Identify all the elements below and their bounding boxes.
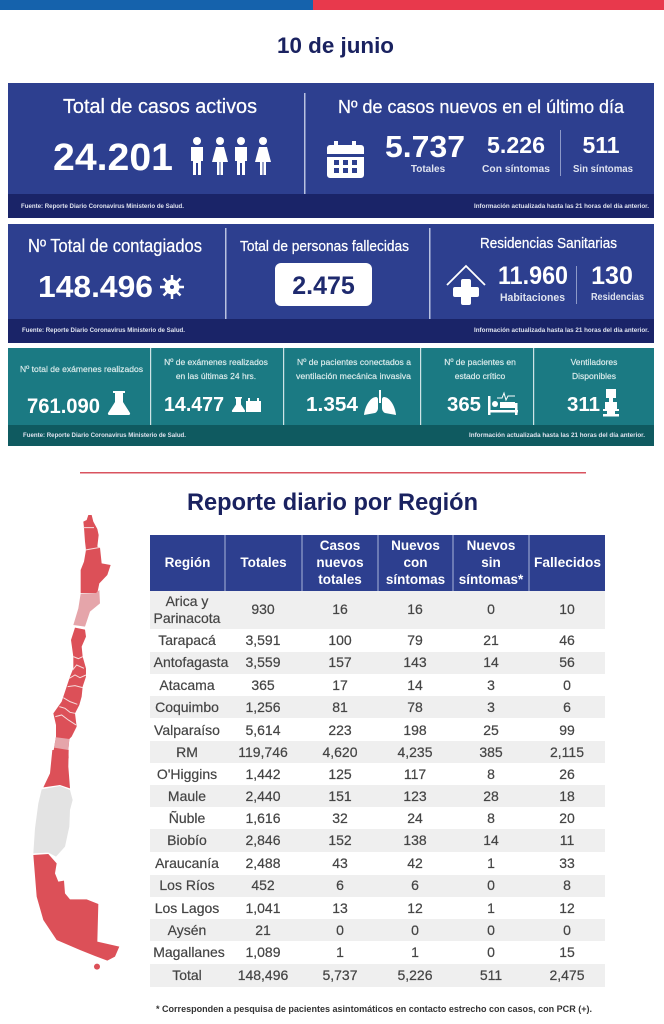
row: Maule: 2,440 (245, 788, 281, 804)
row: Total: Total (172, 967, 202, 983)
row: Los Ríos: 6 (336, 877, 344, 893)
table header: Nuevos (467, 538, 515, 553)
row: Arica y Parinacota: 16 (407, 601, 423, 617)
label: total exams: Nº total de exámenes realizados (20, 364, 143, 374)
row: Arica y Parinacota: 10 (559, 601, 575, 617)
map of Chile (33, 515, 119, 970)
row: Atacama: 0 (563, 677, 571, 693)
row: Valparaíso: 99 (559, 722, 575, 738)
icon: house with cross (447, 266, 485, 305)
row: Magallanes: 15 (559, 944, 575, 960)
row: Valparaíso: Valparaíso (154, 722, 220, 738)
row: RM: 2,115 (550, 744, 584, 760)
update note: Información actualizada hasta las 21 horas del día anterior. (474, 328, 649, 334)
row: Biobío: 152 (328, 832, 352, 848)
table header: Totales (240, 555, 287, 570)
row: Ñuble: 8 (487, 810, 495, 826)
row: Biobío: 138 (403, 832, 427, 848)
row: Total: 2,475 (549, 967, 585, 983)
label: rooms: Habitaciones (500, 292, 565, 304)
row: Magallanes: 1,089 (245, 944, 281, 960)
row: Aysén: 0 (411, 922, 419, 938)
row: Biobío: 11 (560, 832, 574, 848)
row: Biobío: Biobío (167, 832, 207, 848)
label: without symptoms: Sin síntomas (573, 164, 633, 175)
icon: hospital bed (488, 393, 518, 415)
row: Los Ríos: 452 (251, 877, 275, 893)
table header: Fallecidos (534, 555, 601, 570)
row: Aysén: 0 (487, 922, 495, 938)
row: Los Lagos: 1 (487, 900, 495, 916)
row: Magallanes: Magallanes (153, 944, 225, 960)
row: Valparaíso: 223 (328, 722, 352, 738)
row: Tarapacá: 79 (407, 632, 423, 648)
row: Araucanía (155, 855, 575, 871)
row: Coquimbo: 1,256 (245, 699, 281, 715)
number: exams last 24 hours: 14.477 (164, 394, 224, 416)
table header: síntomas (386, 572, 445, 587)
row: Magallanes: 0 (487, 944, 495, 960)
icon: flask (108, 391, 130, 415)
row: Los Lagos: 1,041 (245, 900, 281, 916)
card: deaths: 2.475 (292, 272, 355, 300)
row: RM (176, 744, 584, 760)
row: Arica y Parinacota (154, 593, 575, 626)
title: 10 de junio (277, 33, 394, 58)
row: Los Lagos: Los Lagos (155, 900, 219, 916)
row: O'Higgins: 125 (328, 766, 352, 782)
row: Magallanes (153, 944, 575, 960)
table header: síntomas* (459, 572, 524, 587)
row: Coquimbo: 3 (487, 699, 495, 715)
row: Atacama: 14 (407, 677, 423, 693)
source note: Fuente: Reporte Diario Coronavirus Ministerio de Salud. (21, 204, 184, 210)
row: Los Ríos: 0 (487, 877, 495, 893)
icon: lungs (364, 390, 396, 415)
icon: people (191, 137, 271, 175)
row: Ñuble: 32 (332, 810, 348, 826)
row: Maule (168, 788, 575, 804)
row: Los Ríos: 8 (563, 877, 571, 893)
table header: Casos (320, 538, 360, 553)
heading: deaths: Total de personas fallecidas (240, 238, 409, 255)
table header: sin (481, 555, 501, 570)
row: O'Higgins: O'Higgins (157, 766, 217, 782)
row: Antofagasta: 14 (483, 654, 499, 670)
row: Atacama: Atacama (159, 677, 215, 693)
section heading: Reporte diario por Región (187, 489, 478, 516)
heading: new cases: Nº de casos nuevos en el último día (338, 97, 625, 117)
source note: Fuente: Reporte Diario Coronavirus Ministerio de Salud. (23, 433, 186, 439)
row: Maule: Maule (168, 788, 206, 804)
row: Atacama (159, 677, 571, 693)
row: Los Ríos: 6 (411, 877, 419, 893)
number: with symptoms: 5.226 (487, 132, 545, 158)
row: Arica y Parinacota: Arica y (166, 593, 208, 609)
table: daily report by region (150, 535, 605, 987)
row: Los Lagos (155, 900, 575, 916)
row: O'Higgins: 26 (559, 766, 575, 782)
row: Coquimbo: Coquimbo (155, 699, 219, 715)
row: Aysén: 0 (336, 922, 344, 938)
row: Atacama: 3 (487, 677, 495, 693)
row: Magallanes: 1 (336, 944, 344, 960)
label: available ventilators: Ventiladores (571, 357, 617, 367)
row: Coquimbo: 81 (332, 699, 348, 715)
number: new totals: 5.737 (385, 129, 465, 164)
row: Araucanía: 42 (407, 855, 423, 871)
row: Tarapacá: 100 (328, 632, 352, 648)
footnote: * Corresponden a pesquisa de pacientes asintomáticos en contacto estrecho con casos, con PCR (+). (156, 1004, 592, 1015)
row: Antofagasta: Antofagasta (154, 654, 229, 670)
row: Arica y Parinacota: 930 (251, 601, 275, 617)
row: Magallanes: 1 (411, 944, 419, 960)
top colour bar (0, 0, 664, 10)
row: Maule: 28 (483, 788, 499, 804)
table header: Nuevos (391, 538, 440, 553)
number: ventilated patients: 1.354 (306, 394, 359, 416)
row: Aysén: 21 (255, 922, 271, 938)
row: Ñuble: 24 (407, 810, 423, 826)
number: without symptoms: 511 (582, 132, 620, 158)
row: O'Higgins: 8 (487, 766, 495, 782)
row: Antofagasta: 143 (403, 654, 427, 670)
label: residences: Residencias (591, 292, 644, 303)
label: ventilated patients: ventilación mecánica invasiva (296, 371, 411, 381)
row: Total: 5,226 (397, 967, 433, 983)
heading: residences: Residencias Sanitarias (480, 236, 617, 252)
row: Valparaíso: 198 (403, 722, 427, 738)
row: Araucanía: 2,488 (245, 855, 281, 871)
row: RM: 385 (479, 744, 503, 760)
update note: Información actualizada hasta las 21 horas del día anterior. (469, 433, 645, 439)
row: Los Ríos (159, 877, 571, 893)
row: Araucanía: 33 (559, 855, 575, 871)
row: Arica y Parinacota: 0 (487, 601, 495, 617)
label: exams last 24 hours: Nº de exámenes realizados (164, 357, 268, 367)
row: Araucanía: Araucanía (155, 855, 219, 871)
row: Tarapacá: Tarapacá (158, 632, 216, 648)
number: total exams: 761.090 (27, 395, 100, 418)
label: critical patients: Nº de pacientes en (444, 357, 516, 367)
label: critical patients: estado crítico (455, 371, 506, 381)
heading: total infected: Nº Total de contagiados (28, 236, 202, 256)
row: Maule: 151 (328, 788, 352, 804)
row: Aysén: Aysén (168, 922, 206, 938)
row: Coquimbo (155, 699, 571, 715)
row: Tarapacá: 21 (483, 632, 499, 648)
update note: Información actualizada hasta las 21 horas del día anterior. (474, 204, 649, 210)
number: ventilators: 311 (567, 394, 600, 416)
row: Tarapacá (158, 632, 575, 648)
row: Arica y Parinacota: Parinacota (154, 610, 221, 626)
row: Araucanía: 1 (487, 855, 495, 871)
table header: con (403, 555, 428, 570)
number: active cases: 24.201 (53, 137, 173, 179)
row: Los Lagos: 12 (407, 900, 423, 916)
row: Los Lagos: 13 (332, 900, 348, 916)
label: available ventilators: Disponibles (572, 371, 616, 381)
row: Total: 5,737 (322, 967, 358, 983)
row: O'Higgins: 117 (404, 766, 426, 782)
row: Valparaíso: 25 (483, 722, 499, 738)
row: RM: 4,235 (397, 744, 433, 760)
card: deaths (275, 263, 372, 306)
row: RM: 119,746 (238, 744, 288, 760)
table header: nuevos (316, 555, 364, 570)
table header: totales (318, 572, 362, 587)
row: Antofagasta: 157 (328, 654, 352, 670)
row: Aysén (168, 922, 571, 938)
row: Antofagasta: 3,559 (245, 654, 281, 670)
row: Coquimbo: 78 (407, 699, 423, 715)
row: Valparaíso: 5,614 (245, 722, 281, 738)
row: Atacama: 17 (332, 677, 348, 693)
row: Tarapacá: 46 (559, 632, 575, 648)
row: Total (172, 967, 585, 983)
table header (150, 535, 605, 591)
label: exams last 24 hours: en las últimas 24 hrs. (176, 371, 256, 381)
row: Atacama: 365 (251, 677, 275, 693)
heading: active cases: Total de casos activos (63, 96, 257, 118)
row: Los Lagos: 12 (559, 900, 575, 916)
row: Ñuble: 20 (559, 810, 575, 826)
row: Antofagasta: 56 (559, 654, 575, 670)
row: Ñuble: 1,616 (245, 810, 281, 826)
row: RM: 4,620 (322, 744, 358, 760)
number: rooms: 11.960 (498, 262, 568, 290)
row: Biobío: 14 (483, 832, 499, 848)
panel: totals, deaths, residences (8, 224, 654, 343)
row: O'Higgins (157, 766, 575, 782)
row: RM: RM (176, 744, 198, 760)
source note: Fuente: Reporte Diario Coronavirus Ministerio de Salud. (22, 328, 185, 334)
row: Maule: 123 (403, 788, 427, 804)
row: Biobío: 2,846 (245, 832, 281, 848)
row: Aysén: 0 (563, 922, 571, 938)
label: totals: Totales (411, 164, 446, 175)
label: ventilated patients (296, 357, 411, 381)
row: Total: 511 (480, 967, 502, 983)
icon: virus (160, 275, 184, 299)
table header: Región (165, 555, 210, 570)
row: Ñuble (169, 810, 575, 826)
icon: calendar (327, 141, 364, 178)
label: with symptoms: Con síntomas (482, 164, 550, 175)
icon: flask and calendar (232, 397, 261, 412)
row: Ñuble: Ñuble (169, 810, 205, 826)
label: ventilated patients: Nº de pacientes conectados a (297, 357, 411, 367)
row: Arica y Parinacota: 16 (332, 601, 348, 617)
row: Antofagasta (154, 654, 575, 670)
row: Valparaíso (154, 722, 575, 738)
number: residences: 130 (591, 262, 633, 290)
row: Los Ríos: Los Ríos (159, 877, 215, 893)
icon: ventilator (603, 389, 619, 416)
row: Total: 148,496 (238, 967, 289, 983)
number: critical patients: 365 (447, 394, 481, 416)
row: Biobío (167, 832, 574, 848)
number: total infected: 148.496 (38, 269, 153, 304)
row: Maule: 18 (559, 788, 575, 804)
row: Tarapacá: 3,591 (245, 632, 281, 648)
panel: active and new cases (8, 83, 654, 218)
row: O'Higgins: 1,442 (245, 766, 281, 782)
panel: tests and critical care (8, 348, 654, 446)
row: Coquimbo: 6 (563, 699, 571, 715)
row: Araucanía: 43 (332, 855, 348, 871)
